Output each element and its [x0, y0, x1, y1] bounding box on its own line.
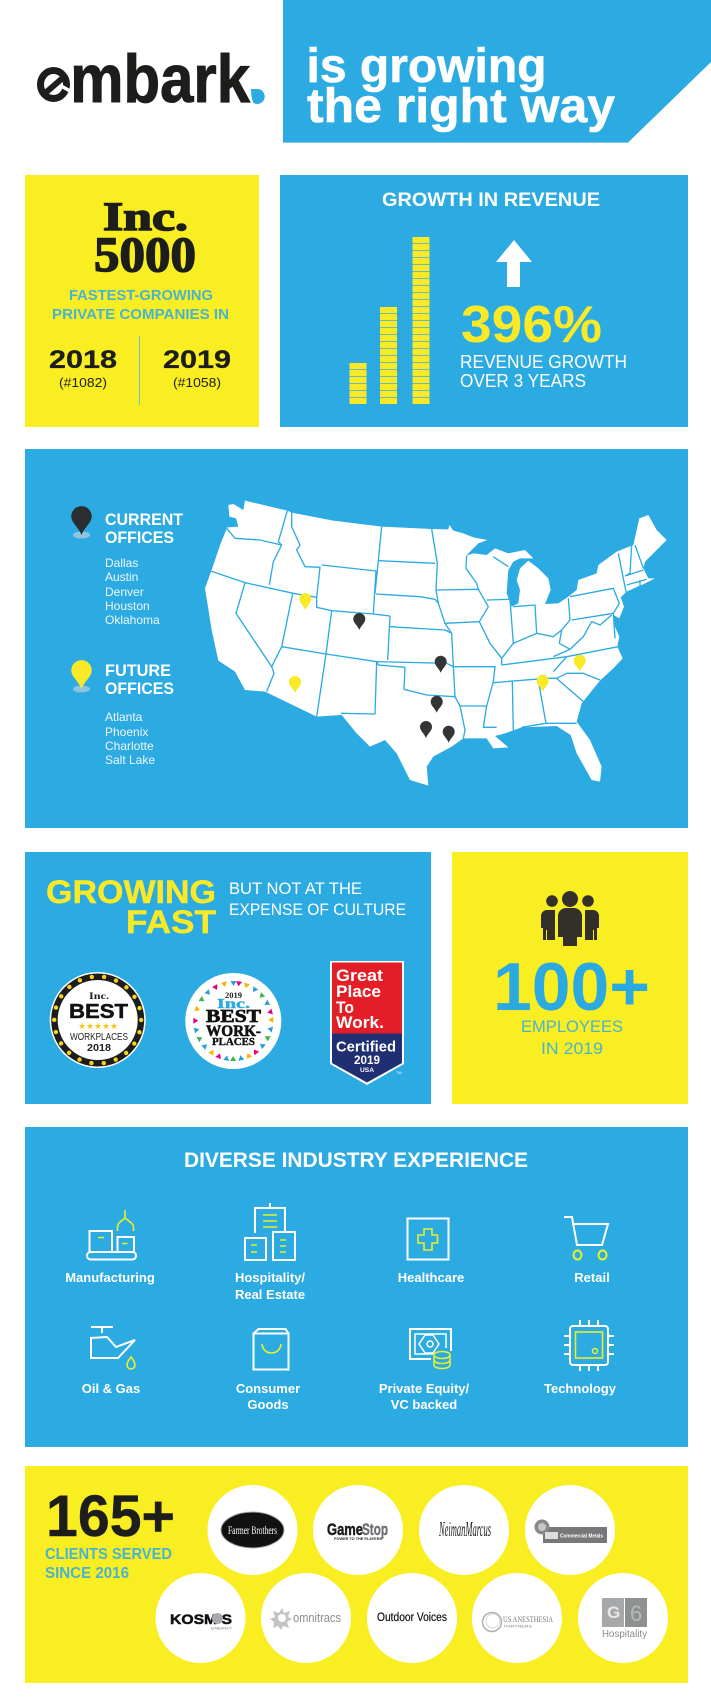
logo: GameStop: Game — [327, 1521, 363, 1539]
logo: GameStop: POWER TO THE PLAYERS — [334, 1537, 382, 1541]
labels: industries: Oil & Gas — [82, 1381, 140, 1396]
icon: technology chip — [564, 1320, 614, 1371]
labels: industries: Hospitality/ — [235, 1270, 305, 1285]
logo: Commercial Metals — [525, 1485, 615, 1575]
logo: embark: embark — [37, 41, 250, 117]
heading: growing fast — [46, 874, 216, 940]
logo: GameStop: Stop — [362, 1521, 388, 1539]
list: current cities — [105, 556, 160, 627]
logo: Neiman Marcus — [419, 1485, 509, 1575]
year 2018: 2018 — [49, 346, 117, 374]
badge: Inc. best workplaces 2018 — [50, 972, 146, 1068]
labels: industries: Real Estate — [235, 1287, 305, 1302]
badge: great place to work: USA — [360, 1067, 374, 1074]
labels: industries: Consumer — [236, 1381, 300, 1396]
text: revenue growth over 3 years — [460, 352, 627, 391]
heading: growth in revenue: GROWTH IN REVENUE — [382, 189, 600, 211]
US map — [205, 501, 667, 786]
badge: Inc. best workplaces 2018: BEST — [69, 1001, 128, 1023]
labels: industries: Private Equity/ — [379, 1381, 470, 1396]
heading: growing fast: GROWING — [46, 874, 216, 910]
legend: current offices: CURRENT — [105, 510, 184, 529]
list: current cities: Denver — [105, 585, 144, 599]
labels: industries: Healthcare — [398, 1270, 464, 1285]
labels: industries — [65, 1270, 617, 1412]
legend: future offices: FUTURE — [105, 661, 171, 680]
badge: 2019 Inc. best workplaces: Inc. — [217, 997, 250, 1012]
Inc. 5000 logo — [94, 194, 196, 282]
heading: diverse industry experience: DIVERSE INDUSTRY EXPERIENCE — [184, 1149, 528, 1172]
legend: current offices: OFFICES — [105, 528, 174, 547]
labels: industries: VC backed — [391, 1397, 457, 1412]
legend: current offices — [71, 506, 184, 627]
logo: US Anesthesia Partners: US ANESTHESIA — [503, 1615, 553, 1624]
badge: Inc. best workplaces 2018: 2018 — [87, 1043, 111, 1054]
logo: Outdoor Voices — [367, 1573, 457, 1663]
panel: Inc. 5000 — [25, 175, 259, 427]
badge: 2019 Inc. best workplaces: 2019 — [225, 991, 242, 1000]
year 2018: (#1082) — [59, 375, 107, 390]
text: fastest-growing — [52, 287, 229, 323]
labels: industries: Retail — [574, 1270, 610, 1285]
logo: US Anesthesia Partners: PARTNERS — [504, 1624, 533, 1628]
logo: Farmer Brothers — [208, 1485, 298, 1575]
badge: great place to work — [330, 961, 404, 1085]
text: employees in 2019: EMPLOYEES — [521, 1017, 623, 1036]
logo: Kosmos Energy: ENERGY — [211, 1626, 232, 1630]
pins: current offices on map — [353, 613, 455, 743]
Inc. 5000 logo: Inc. — [103, 194, 188, 239]
badge: great place to work: Place — [336, 983, 381, 1001]
text: but not at the expense of culture: BUT NOT AT THE — [229, 879, 362, 898]
list: current cities: Austin — [105, 570, 138, 584]
logo: G6 Hospitality: G — [607, 1603, 620, 1622]
text: clients served since 2016 — [45, 1546, 172, 1582]
logo: omnitracs: omnitracs — [293, 1611, 341, 1625]
badge: great place to work: Certified — [336, 1038, 396, 1056]
stat: 165+: 165+ — [46, 1484, 175, 1549]
badge: Inc. best workplaces 2018: ★★★★★ — [78, 1022, 118, 1032]
badge: 2019 Inc. best workplaces: PLACES — [212, 1036, 255, 1048]
logo: Farmer Brothers: Farmer Brothers — [228, 1523, 277, 1537]
list: future cities: Charlotte — [105, 739, 154, 753]
labels: industries: Technology — [544, 1381, 617, 1396]
logo: GameStop — [313, 1485, 403, 1575]
pins: future offices on map — [289, 593, 586, 693]
icon: consumer goods — [254, 1329, 288, 1370]
year 2019 — [163, 346, 231, 390]
text: revenue growth over 3 years: REVENUE GROWTH — [460, 352, 627, 372]
text: employees in 2019 — [521, 1017, 623, 1058]
labels: industries: Goods — [247, 1397, 289, 1412]
text: revenue growth over 3 years: OVER 3 YEARS — [460, 371, 586, 391]
list: current cities: Dallas — [105, 556, 138, 570]
badge: 2019 Inc. best workplaces — [185, 973, 281, 1069]
legend: future offices: OFFICES — [105, 679, 174, 698]
panel: offices map — [25, 449, 688, 828]
list: future cities — [105, 710, 155, 767]
list: future cities: Atlanta — [105, 710, 143, 724]
legend: future offices — [71, 660, 174, 767]
stat: 100+: 100+ — [493, 949, 650, 1025]
text: but not at the expense of culture: EXPENSE OF CULTURE — [229, 900, 406, 919]
badge: great place to work: 2019 — [354, 1053, 380, 1067]
arrow up — [496, 240, 532, 287]
heading: growing fast: FAST — [126, 904, 216, 940]
icon: manufacturing — [87, 1210, 136, 1260]
Inc. 5000 logo: 5000 — [94, 226, 196, 282]
icon: oil and gas — [91, 1327, 135, 1369]
list: current cities: Oklahoma — [105, 613, 160, 627]
bar chart — [350, 237, 430, 404]
header banner — [283, 0, 711, 143]
badge: great place to work: TM — [396, 1070, 402, 1075]
icon: people — [541, 891, 599, 946]
icon: private equity — [410, 1329, 451, 1369]
logo: US Anesthesia Partners — [472, 1573, 562, 1663]
heading: is growing the right way — [306, 39, 615, 133]
year 2019: 2019 — [163, 346, 231, 374]
panel: employees — [452, 852, 688, 1104]
list: current cities: Houston — [105, 599, 150, 613]
text: fastest-growing: PRIVATE COMPANIES IN — [52, 306, 229, 323]
text: clients served since 2016: CLIENTS SERVED — [45, 1546, 172, 1563]
list: future cities: Phoenix — [105, 725, 148, 739]
stat: 396%: 396% — [461, 296, 602, 354]
panel: growth in revenue — [280, 175, 688, 427]
logo: omnitracs — [261, 1573, 351, 1663]
text: but not at the expense of culture — [229, 879, 406, 919]
text: fastest-growing: FASTEST-GROWING — [69, 287, 213, 304]
heading: is growing the right way: is growing — [306, 39, 546, 93]
panel: growing fast — [25, 852, 431, 1104]
panel: diverse industry experience — [25, 1127, 688, 1447]
logo: Outdoor Voices: Outdoor Voices — [377, 1612, 447, 1624]
panel: clients — [25, 1466, 688, 1683]
heading: is growing the right way: the right way — [307, 79, 615, 133]
badge: Inc. best workplaces 2018: WORKPLACES — [70, 1032, 128, 1043]
icon: healthcare — [408, 1218, 448, 1260]
badge: Inc. best workplaces 2018: Inc. — [89, 992, 109, 1002]
year 2019: (#1058) — [173, 375, 221, 390]
badge: great place to work: Work. — [336, 1014, 384, 1032]
text: clients served since 2016: SINCE 2016 — [45, 1565, 129, 1582]
badge: great place to work: Great — [336, 967, 384, 985]
logo: Commercial Metals: Commercial Metals — [560, 1534, 603, 1540]
icon: hospitality — [245, 1203, 295, 1260]
labels: industries: Manufacturing — [65, 1270, 155, 1285]
logo: Neiman Marcus: NeimanMarcus — [439, 1517, 491, 1541]
text: employees in 2019: IN 2019 — [541, 1039, 603, 1058]
year 2018 — [49, 346, 117, 390]
logo: G6 Hospitality: Hospitality — [602, 1628, 648, 1640]
badge: 2019 Inc. best workplaces: BEST — [206, 1006, 261, 1026]
logo: Kosmos Energy — [156, 1573, 246, 1663]
logo: G6 Hospitality — [578, 1573, 668, 1663]
logo: G6 Hospitality: 6 — [630, 1601, 642, 1626]
badge: 2019 Inc. best workplaces: WORK- — [206, 1023, 261, 1040]
badge: great place to work: To — [336, 999, 354, 1017]
logo: Kosmos Energy: KOSM S — [170, 1611, 232, 1627]
icon: retail cart — [564, 1217, 608, 1260]
list: future cities: Salt Lake — [105, 753, 155, 767]
